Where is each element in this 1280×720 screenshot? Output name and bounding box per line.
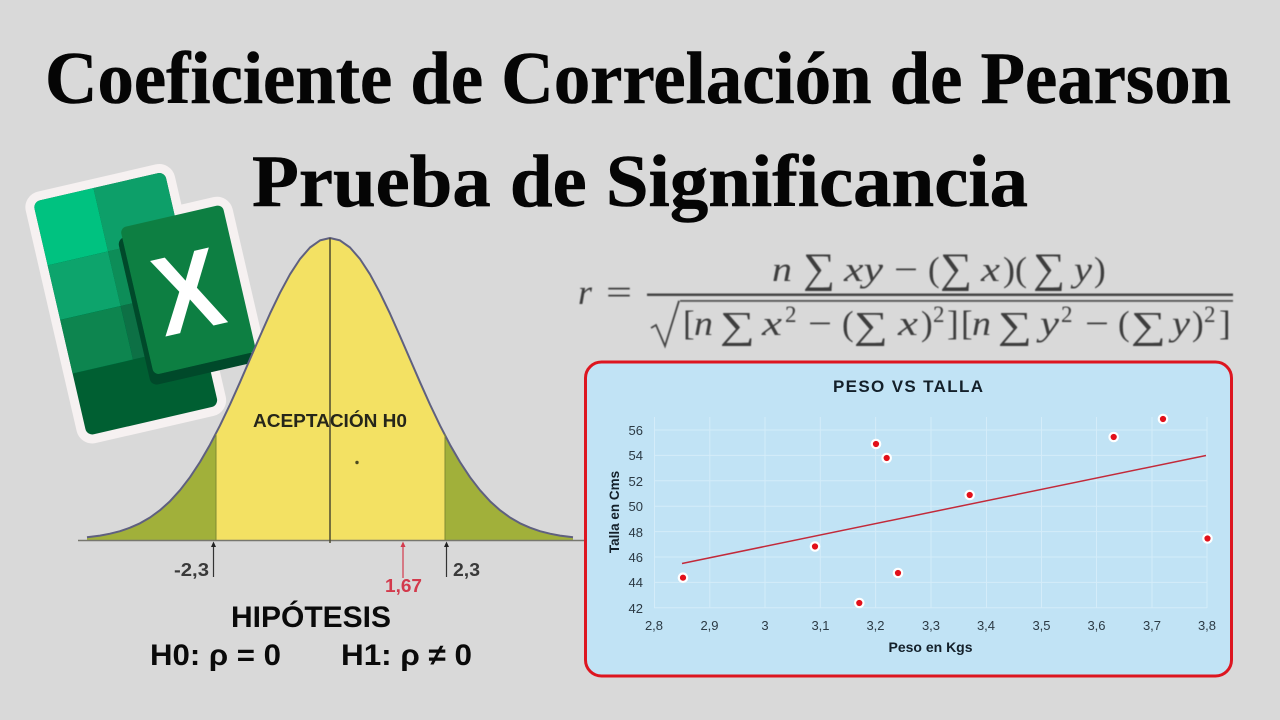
y axis ticks: 54 bbox=[629, 448, 643, 463]
formula: Pearson coefficient: 2 bbox=[785, 302, 796, 327]
rejection region: right tail bbox=[445, 435, 573, 540]
rejection region: left tail bbox=[87, 433, 216, 540]
numerator: xy bbox=[843, 250, 884, 289]
x axis ticks: 3,2 bbox=[866, 618, 885, 633]
formula: Pearson coefficient: [ bbox=[683, 304, 695, 343]
formula: Pearson coefficient: ( bbox=[842, 304, 854, 343]
numerator: x bbox=[980, 250, 1001, 289]
y axis ticks: 46 bbox=[629, 550, 643, 565]
formula: Pearson coefficient: r bbox=[578, 273, 592, 312]
y axis ticks: 42 bbox=[629, 601, 643, 616]
numerator: )( bbox=[1003, 250, 1027, 289]
formula: Pearson coefficient: [ bbox=[961, 304, 973, 343]
numerator bbox=[772, 246, 1106, 292]
y axis ticks: 44 bbox=[629, 575, 643, 590]
formula: Pearson coefficient: ∑ bbox=[720, 305, 755, 347]
hypotheses bbox=[150, 600, 472, 672]
center line bbox=[329, 238, 331, 543]
title: Prueba de Significancia bbox=[252, 141, 1028, 223]
acceptance region bbox=[216, 238, 445, 540]
numerator: ( bbox=[928, 250, 940, 289]
y axis label: Talla en Cms bbox=[607, 471, 622, 553]
hypotheses: H1: ρ ≠ 0 bbox=[341, 639, 472, 672]
x axis ticks: 3,5 bbox=[1032, 618, 1051, 633]
formula: Pearson coefficient: 2 bbox=[1204, 302, 1216, 327]
chart title: PESO VS TALLA bbox=[833, 377, 983, 396]
x axis label: Peso en Kgs bbox=[888, 639, 973, 655]
fraction bar bbox=[647, 294, 1233, 296]
numerator: ∑ bbox=[1033, 246, 1065, 292]
bell curve bbox=[78, 238, 585, 596]
x axis ticks: 2,9 bbox=[700, 618, 719, 633]
formula: Pearson coefficient: ( bbox=[1118, 304, 1130, 343]
denominator bbox=[651, 301, 679, 346]
x axis ticks: 3,3 bbox=[922, 618, 940, 633]
formula: Pearson coefficient: ] bbox=[947, 304, 959, 343]
dot marker bbox=[355, 461, 359, 464]
y axis ticks bbox=[629, 423, 643, 616]
label: acceptance: ACEPTACIÓN H0 bbox=[253, 410, 407, 431]
x axis ticks bbox=[645, 618, 1216, 633]
x axis ticks: 3,7 bbox=[1143, 618, 1161, 633]
trend line bbox=[682, 456, 1206, 564]
hypotheses: HIPÓTESIS bbox=[231, 600, 391, 634]
formula: Pearson coefficient: x bbox=[897, 304, 919, 343]
formula: Pearson coefficient: ∑ bbox=[1131, 305, 1166, 347]
formula: Pearson coefficient bbox=[578, 246, 1233, 347]
formula: Pearson coefficient: y bbox=[1169, 304, 1191, 343]
x axis ticks: 3,4 bbox=[977, 618, 995, 633]
formula: Pearson coefficient: − bbox=[1085, 304, 1109, 343]
formula: Pearson coefficient: 2 bbox=[933, 302, 944, 327]
numerator: ∑ bbox=[940, 246, 972, 292]
data points bbox=[679, 415, 1212, 607]
icon: Excel logo bbox=[33, 172, 259, 436]
formula: Pearson coefficient: ) bbox=[921, 304, 933, 343]
numerator: ∑ bbox=[803, 246, 835, 292]
curve outline bbox=[87, 238, 573, 537]
formula: Pearson coefficient: n bbox=[972, 304, 991, 343]
numerator: − bbox=[894, 250, 918, 289]
title: Coeficiente de Correlación de Pearson bbox=[45, 38, 1231, 120]
x axis ticks: 3 bbox=[761, 618, 769, 633]
panel: scatter chart bbox=[586, 362, 1232, 676]
hypotheses: H0: ρ = 0 bbox=[150, 639, 281, 672]
x axis ticks: 3,1 bbox=[811, 618, 830, 633]
arrow: lower critical value: -2,3 bbox=[174, 560, 209, 580]
y axis ticks: 48 bbox=[629, 525, 643, 540]
title bbox=[45, 38, 1231, 223]
formula: Pearson coefficient: ∑ bbox=[998, 305, 1032, 347]
formula: Pearson coefficient: n bbox=[694, 304, 713, 343]
y axis ticks: 52 bbox=[629, 474, 643, 489]
icon: Excel logo: X bbox=[142, 223, 234, 360]
baseline axis bbox=[78, 540, 585, 542]
formula: Pearson coefficient: = bbox=[606, 273, 632, 312]
formula: Pearson coefficient: − bbox=[808, 304, 832, 343]
x axis ticks: 3,8 bbox=[1198, 618, 1216, 633]
numerator: n bbox=[772, 250, 792, 289]
formula: Pearson coefficient: ] bbox=[1219, 304, 1231, 343]
y axis ticks: 50 bbox=[629, 499, 643, 514]
x axis ticks: 3,6 bbox=[1087, 618, 1106, 633]
formula: Pearson coefficient: y bbox=[1036, 304, 1060, 343]
numerator: y bbox=[1071, 250, 1093, 289]
formula: Pearson coefficient: ∑ bbox=[854, 305, 888, 347]
formula: Pearson coefficient: 2 bbox=[1061, 302, 1072, 327]
x axis ticks: 2,8 bbox=[645, 618, 663, 633]
arrow: test statistic: 1,67 bbox=[385, 576, 422, 596]
arrow: upper critical value bbox=[444, 542, 480, 580]
arrow: test statistic bbox=[385, 542, 422, 596]
numerator: ) bbox=[1094, 250, 1106, 289]
arrow: lower critical value bbox=[174, 542, 216, 580]
y axis ticks: 56 bbox=[629, 423, 643, 438]
arrow: upper critical value: 2,3 bbox=[453, 560, 480, 580]
formula: Pearson coefficient: ) bbox=[1192, 304, 1204, 343]
formula: Pearson coefficient: x bbox=[761, 304, 783, 343]
